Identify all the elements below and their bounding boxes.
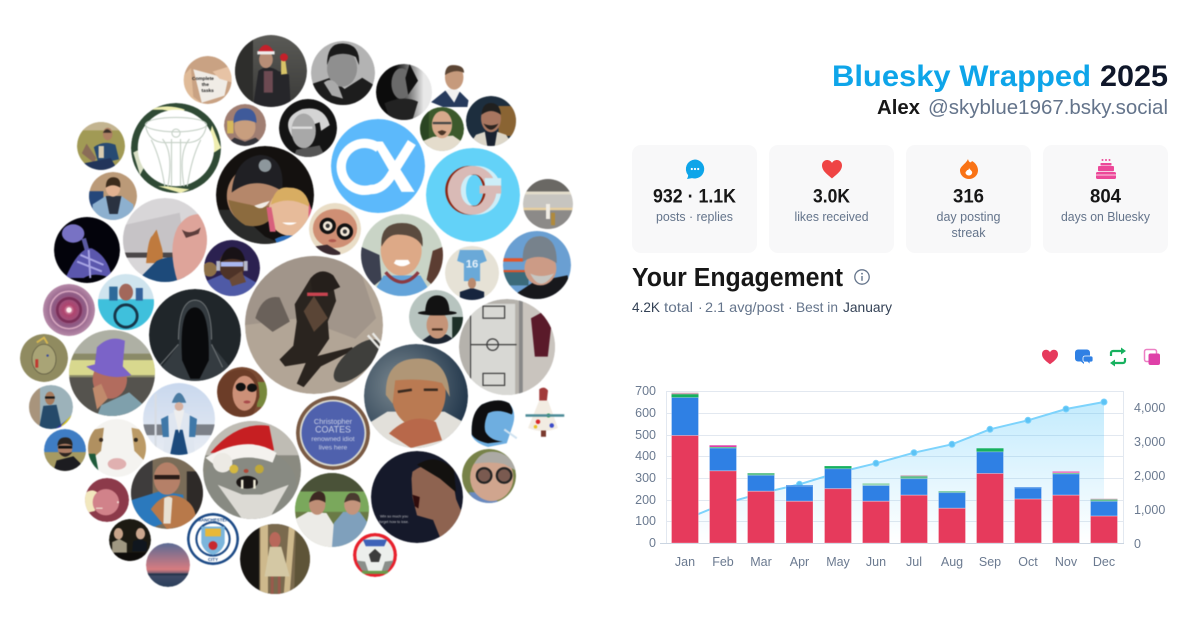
avatar: x-ray skeleton (54, 217, 120, 283)
engagement summary: January (843, 299, 892, 315)
cumulative area (685, 402, 1104, 543)
avatar: father and child selfie (216, 146, 314, 244)
month labels: Jun (866, 555, 886, 569)
bar: Mar (748, 473, 774, 543)
user name and handle: @skyblue1967.bsky.social (928, 97, 1168, 119)
right axis labels: 4,000 (1134, 401, 1165, 415)
month labels: Mar (750, 555, 772, 569)
stat card: posts and replies (632, 145, 757, 253)
left axis labels: 100 (635, 514, 656, 528)
combo chart: monthly engagement bars with cumulative line (635, 384, 1165, 569)
stacked bars (672, 393, 1118, 543)
avatar: cat and woman selfie (123, 198, 207, 282)
month labels: Jul (906, 555, 922, 569)
avatar: man in dark room (466, 96, 516, 146)
avatar: chalk drawing (20, 334, 68, 382)
icon: speech bubble (686, 160, 704, 179)
right axis labels: 2,000 (1134, 469, 1165, 483)
avatar: tactics board and shirt (459, 299, 556, 395)
avatar: two boys in suits (109, 519, 151, 561)
right axis labels (1134, 401, 1165, 551)
engagement summary: · (788, 299, 793, 315)
user name and handle: Alex (877, 97, 920, 119)
avatar: man in grey beanie (503, 231, 571, 299)
avatar: person with headphones (202, 240, 260, 296)
month labels: Oct (1018, 555, 1038, 569)
avatar: Manchester City badge (187, 513, 239, 565)
icon: reposts legend arrows (1110, 348, 1126, 366)
avatar: hooded figure (149, 289, 241, 381)
bar: Sep (976, 448, 1004, 543)
month labels: Aug (941, 555, 963, 569)
engagement summary: 4.2K (632, 299, 661, 315)
stat card: days on Bluesky (1043, 145, 1168, 253)
bar: Nov (1052, 471, 1080, 543)
avatar: elderly scholar (279, 99, 337, 157)
avatar: woman in dress in mirror (240, 524, 310, 594)
month labels: May (826, 555, 851, 569)
icon: info (855, 270, 869, 284)
stat card: day posting streak: day posting (936, 210, 1001, 224)
left axis labels: 300 (635, 471, 656, 485)
avatar: bald man with glasses (420, 107, 464, 151)
left axis labels: 0 (649, 536, 656, 550)
avatar: man in purple hat (69, 330, 155, 416)
month labels: Feb (712, 555, 734, 569)
avatar: blue plaque (296, 396, 370, 470)
avatar: man in bowler hat (409, 290, 463, 344)
chart legend (1042, 348, 1160, 366)
stat card: day posting streak: streak (952, 226, 986, 240)
engagement summary: total (664, 299, 693, 315)
bar: Jun (862, 483, 890, 543)
bar: Jan (672, 393, 698, 543)
avatar: book meme (184, 56, 232, 104)
avatar: man sitting in a field (77, 122, 125, 170)
left axis labels: 200 (635, 493, 656, 507)
bar: Oct (1014, 487, 1042, 543)
avatar: smiling man (361, 214, 443, 296)
avatar: baby with glasses (309, 203, 361, 255)
icon: heart (822, 160, 842, 178)
stat card: day posting streak (906, 145, 1031, 253)
stat card: likes received: likes received (794, 210, 869, 224)
left axis labels: 700 (635, 384, 656, 398)
icon: replies legend bubbles (1075, 350, 1093, 364)
avatar: stylised man with slick hair (364, 344, 468, 448)
avatar: guinea pig (88, 419, 146, 477)
avatar: shouting footballer (371, 451, 463, 543)
avatar: older man with round glasses (462, 449, 516, 503)
avatar: CX logo (331, 119, 425, 213)
avatar: Pallas cat in santa hat (203, 421, 301, 521)
avatar: woman with sunglasses (217, 367, 270, 417)
avatar: man with santa hat (235, 35, 307, 107)
avatar: C logo (426, 148, 520, 242)
left axis labels: 500 (635, 428, 656, 442)
avatar: monochrome figure (376, 64, 432, 120)
bar: Jul (900, 475, 928, 543)
bar: May (824, 466, 852, 543)
avatar: man in patterned shirt (29, 385, 73, 429)
avatar: man in suit (431, 65, 468, 107)
stat card: days on Bluesky: 804 (1090, 186, 1121, 208)
right axis labels: 0 (1134, 537, 1141, 551)
left axis labels (635, 384, 656, 550)
avatar: bearded man in sunglasses (44, 429, 86, 471)
month labels (675, 555, 1115, 569)
right axis labels: 3,000 (1134, 435, 1165, 449)
cumulative line with markers (685, 399, 1107, 520)
icon: quotes legend squares (1144, 350, 1160, 365)
engagement summary: 2.1 avg/post (705, 299, 784, 315)
icon: flame (960, 159, 978, 179)
avatar: two men in a shopping centre (295, 473, 369, 547)
avatar: spiral staircase (43, 284, 95, 336)
month labels: Sep (979, 555, 1001, 569)
month labels: Jan (675, 555, 695, 569)
avatar: blue truck with people (98, 274, 154, 330)
avatar: sunset over city (146, 543, 190, 587)
avatar: wizard in snow (143, 383, 215, 455)
avatar: green ring logo (131, 103, 221, 193)
avatar: dachshund standing (245, 256, 387, 394)
bar: Apr (786, 485, 813, 543)
avatar: man in blue jacket (89, 172, 137, 220)
right axis labels: 1,000 (1134, 503, 1165, 517)
month labels: Nov (1055, 555, 1078, 569)
stat card: day posting streak: 316 (953, 186, 984, 208)
bar: Dec (1090, 499, 1118, 543)
left axis labels: 600 (635, 406, 656, 420)
engagement summary (632, 299, 892, 315)
avatar: beanie man (224, 104, 266, 146)
icon: birthday cake (1096, 159, 1116, 179)
icon: likes legend heart (1042, 350, 1058, 364)
panel: follower avatar bubble cluster (20, 35, 573, 594)
avatar: grey portrait (311, 41, 375, 105)
bar: Aug (938, 491, 966, 543)
stat card: days on Bluesky: days on Bluesky (1061, 210, 1151, 224)
left axis labels: 400 (635, 449, 656, 463)
avatar: blue and black illustration (472, 400, 517, 447)
stat card: posts and replies: posts · replies (656, 210, 733, 224)
avatar: football badge (353, 533, 397, 577)
heading: your engagement: Your Engagement (632, 264, 843, 292)
stat card: likes received (769, 145, 894, 253)
avatar: man with dog (131, 457, 203, 529)
avatar: floral dress figure (526, 388, 564, 437)
title: Bluesky Wrapped (832, 60, 1091, 93)
stat card: likes received: 3.0K (813, 186, 850, 208)
avatar: street with statue (523, 179, 573, 230)
month labels: Dec (1093, 555, 1115, 569)
bar: Feb (710, 445, 736, 543)
stat card: posts and replies: 932 · 1.1K (653, 186, 736, 208)
title: 2025 (1100, 60, 1168, 93)
avatar: woman with red tint (85, 478, 129, 522)
avatar: man under framed shirt (445, 246, 499, 300)
month labels: Apr (790, 555, 809, 569)
engagement summary: Best in (796, 299, 838, 315)
engagement summary: · (698, 299, 703, 315)
